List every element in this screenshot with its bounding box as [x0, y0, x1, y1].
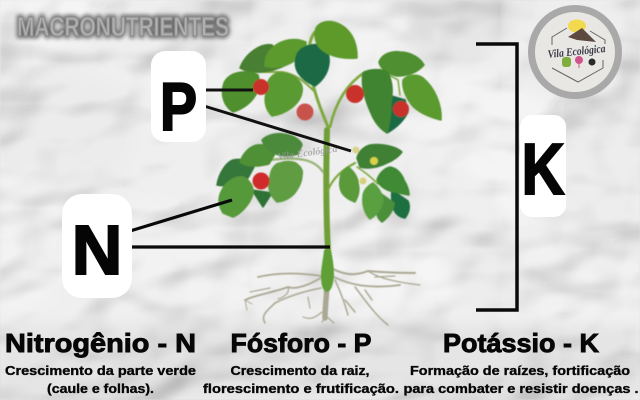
heading: Nitrogênio: Nitrogênio - N: [5, 328, 196, 358]
label box: N: [62, 194, 132, 298]
roots: [245, 269, 420, 325]
label box: K: [520, 115, 566, 217]
text: Fósforo description: [203, 364, 399, 396]
logo hexagon: [552, 28, 605, 82]
text: Fósforo description: florescimento e frutificação.: [203, 382, 399, 396]
logo name: Vila Ecológica: [547, 43, 606, 61]
tomatoes: [252, 79, 409, 190]
logo sun: [568, 20, 586, 32]
title: MACRONUTRIENTES: [17, 11, 229, 42]
watermark: Vila Ecológica: [277, 144, 338, 163]
section: Nitrogênio: [5, 328, 196, 396]
upper leaves: [222, 21, 441, 133]
text: Nitrogênio description: (caule e folhas).: [47, 382, 154, 396]
label box: N: N: [72, 211, 122, 289]
title: MACRONUTRIENTES: [17, 11, 229, 42]
text: Nitrogênio description: Crescimento da parte verde: [5, 364, 196, 378]
connector lines: N: [130, 200, 330, 247]
text: Potássio description: [404, 364, 638, 396]
bracket: K: [476, 44, 517, 310]
lower leaves: [217, 134, 409, 222]
logo badge: [532, 8, 618, 96]
section: Fósforo: [203, 328, 399, 396]
label box: P: P: [160, 69, 197, 145]
heading: Potássio: Potássio - K: [443, 328, 599, 358]
text: Nitrogênio description: [5, 364, 196, 396]
text: Fósforo description: Crescimento da raiz,: [230, 364, 370, 378]
logo icons: [562, 56, 596, 68]
plant illustration: [217, 21, 441, 325]
connector lines: P: [204, 90, 351, 151]
logo roof: [568, 28, 596, 42]
heading: Fósforo: Fósforo - P: [230, 328, 372, 358]
text: Potássio description: para combater e resistir doenças .: [404, 382, 638, 396]
stems: [258, 32, 400, 250]
label box: P: [151, 51, 206, 145]
label box: K: K: [522, 130, 564, 210]
stem base: [321, 250, 334, 292]
text: Potássio description: Formação de raízes, fortificação: [410, 364, 630, 378]
section: Potássio: [404, 328, 638, 396]
